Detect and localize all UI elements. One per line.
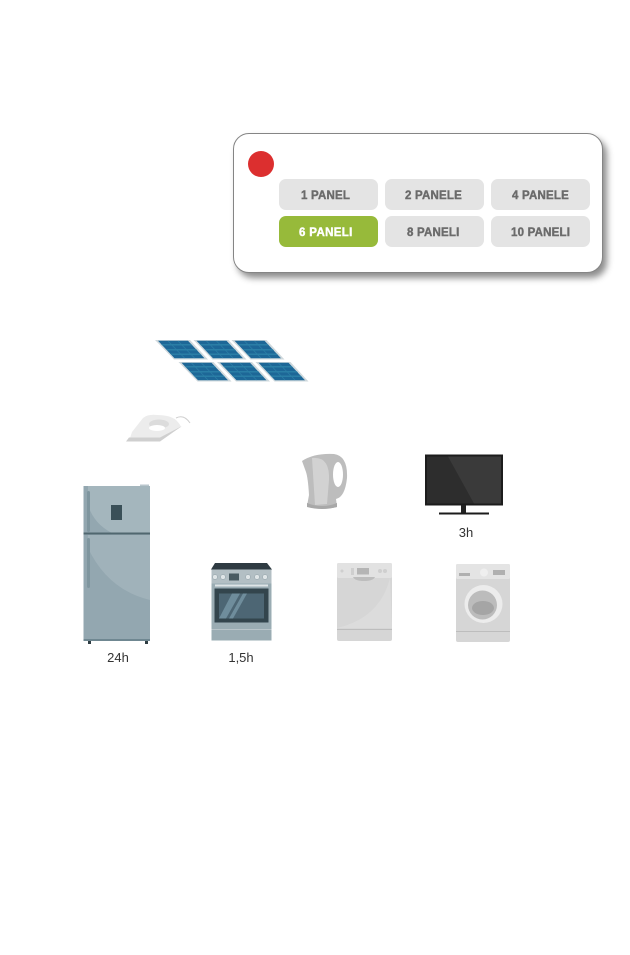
- button: 6 panels selected: 6 PANELI: [299, 227, 353, 239]
- button: 2 panels: [385, 179, 484, 210]
- button: 1 panel: 1 PANEL: [301, 190, 350, 202]
- icon: iron: [126, 415, 190, 442]
- label: refrigerator hours: 24h: [107, 650, 129, 665]
- icon: television: [425, 454, 503, 514]
- icon: washing machine: [456, 564, 510, 642]
- button: 1 panel: [279, 179, 378, 210]
- button: 4 panels: [491, 179, 590, 210]
- icon: oven: [211, 563, 272, 640]
- icon: refrigerator: [84, 484, 150, 644]
- button: 10 panels: 10 PANELI: [511, 227, 570, 239]
- icon: six solar panels: [155, 340, 308, 382]
- button: 10 panels: [491, 216, 590, 247]
- icon: red indicator dot: [248, 151, 274, 177]
- button: 6 panels selected: [279, 216, 378, 247]
- button: 8 panels: [385, 216, 484, 247]
- label: oven hours: 1,5h: [228, 650, 254, 665]
- icon: dishwasher: [337, 563, 392, 641]
- button: 4 panels: 4 PANELE: [512, 190, 569, 202]
- panel: number of solar panels selector: [233, 133, 603, 273]
- icon: kettle: [302, 454, 347, 509]
- button: 2 panels: 2 PANELE: [405, 190, 462, 202]
- button: 8 panels: 8 PANELI: [407, 227, 460, 239]
- label: television hours: 3h: [459, 525, 473, 540]
